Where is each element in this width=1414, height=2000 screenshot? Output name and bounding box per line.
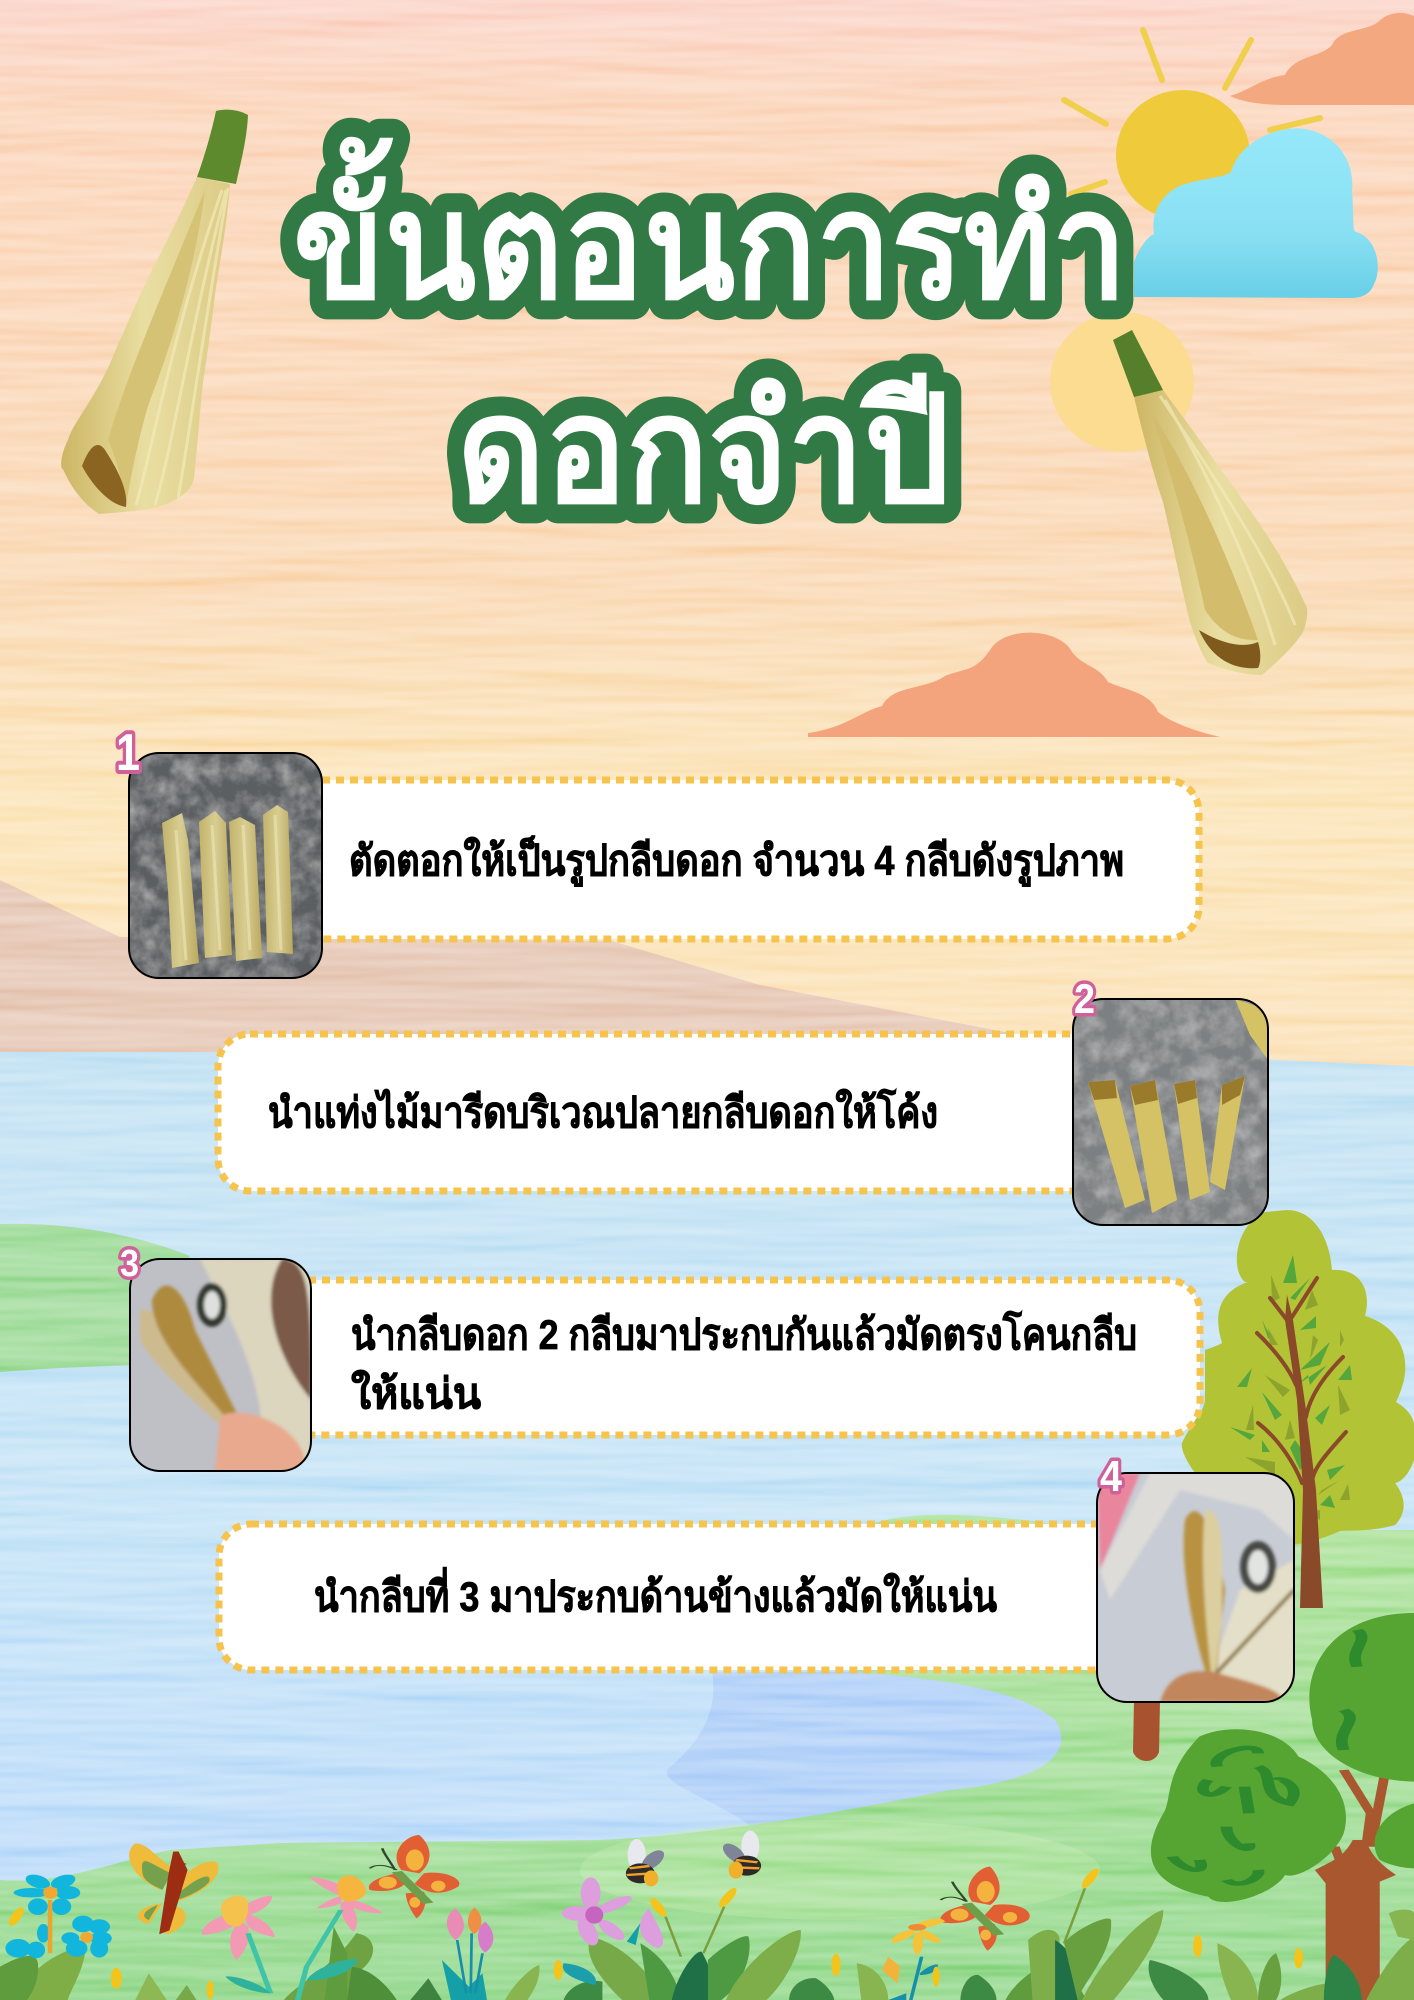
flower: blue daisies bbox=[5, 1873, 112, 1958]
flower: pink lilies bbox=[202, 1875, 383, 2000]
step 1 bbox=[116, 724, 1199, 978]
step 3 text bbox=[351, 1310, 1137, 1417]
card 3 bbox=[150, 1280, 1200, 1435]
card 1 bbox=[150, 780, 1199, 939]
icon: orange butterfly left bbox=[369, 1835, 459, 1918]
step 1 text: ตัดตอกให้เป็นรูปกลีบดอก จำนวน 4 กลีบดังรูปภาพ bbox=[349, 835, 1124, 887]
background: left river bank bbox=[0, 1224, 190, 1372]
leaf: teal leaf bbox=[563, 1963, 596, 1985]
card 4 bbox=[219, 1524, 1216, 1670]
flower: purple bloom bbox=[562, 1877, 663, 1948]
number badge 4: 4 bbox=[1100, 1452, 1122, 1501]
illustration: left straw flower bbox=[61, 110, 248, 514]
title line 1: ขั้นตอนการทำ bbox=[293, 136, 1127, 330]
number badge 2: 2 bbox=[1074, 975, 1095, 1022]
photo 2 bbox=[1073, 999, 1268, 1225]
step 4 bbox=[219, 1452, 1294, 1702]
illustration: right straw flower bbox=[1113, 330, 1307, 675]
flower: tulips bbox=[447, 1907, 493, 1993]
leaves: bottom foliage bbox=[0, 1909, 1414, 2000]
flower: yellow daisy bbox=[882, 1919, 945, 2000]
cloud: lower orange bbox=[808, 633, 1220, 737]
background: right land bbox=[0, 1515, 1414, 2000]
number badge 1: 1 bbox=[116, 724, 140, 782]
photo 1 bbox=[129, 753, 322, 978]
icon: yellow butterfly bbox=[129, 1843, 218, 1934]
step 3 text: นำกลีบดอก 2 กลีบมาประกบกันแล้วมัดตรงโคนกลีบ bbox=[351, 1310, 1137, 1358]
background: water bbox=[0, 1052, 1414, 2000]
background: pale meadow highlight bbox=[580, 1820, 1100, 1920]
tree: dark green tree bbox=[1151, 1613, 1414, 2000]
photo 4 bbox=[1097, 1473, 1294, 1702]
icon: orange butterfly right bbox=[941, 1867, 1030, 1951]
background: deep water patch bbox=[667, 1672, 1070, 1860]
cloud: top right orange bbox=[1230, 13, 1414, 105]
icon: sun bbox=[1064, 30, 1320, 220]
tree: light green tree bbox=[1182, 1210, 1414, 1608]
background: mountains bbox=[0, 880, 1060, 1056]
card 2 bbox=[218, 1034, 1215, 1191]
icon: bee right bbox=[718, 1831, 761, 1879]
step 2 bbox=[218, 975, 1268, 1225]
icon: pale sun bbox=[1050, 312, 1194, 452]
step 3 bbox=[120, 1243, 1200, 1471]
photo 3 bbox=[130, 1259, 311, 1471]
tree: trunk behind step 4 bbox=[1133, 1700, 1160, 1761]
flower: yellow buds bbox=[6, 1868, 1303, 1999]
bottom scenery bbox=[0, 1613, 1414, 2000]
icon: blue cloud bbox=[1134, 128, 1378, 298]
number badge 3: 3 bbox=[120, 1243, 139, 1285]
step 3 text: ให้แน่น bbox=[351, 1369, 481, 1417]
title line 2: ดอกจำปี bbox=[457, 366, 950, 534]
icon: bee left bbox=[626, 1839, 669, 1886]
title bbox=[293, 136, 1127, 534]
step 2 text: นำแท่งไม้มารีดบริเวณปลายกลีบดอกให้โค้ง bbox=[268, 1088, 938, 1136]
background: sky bbox=[0, 0, 1414, 1070]
step 4 text: นำกลีบที่ 3 มาประกบด้านข้างแล้วมัดให้แน่น bbox=[314, 1567, 997, 1620]
